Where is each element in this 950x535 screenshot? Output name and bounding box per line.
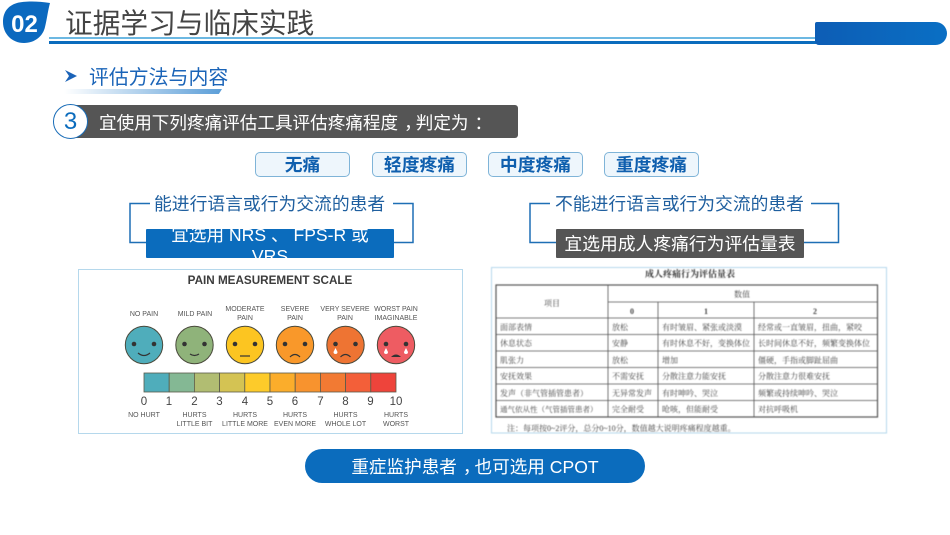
- table header: 2: [813, 307, 817, 316]
- scale numbers: 3: [216, 396, 223, 408]
- bracket: [529, 202, 840, 244]
- heading: 不能进行语言或行为交流的患者: [555, 194, 804, 214]
- chip: mild: [372, 152, 467, 177]
- table rows: 肌张力: [500, 355, 524, 365]
- top right pill: [815, 22, 947, 45]
- pain labels: PAIN: [287, 315, 303, 322]
- hurt labels: HURTS: [283, 412, 307, 419]
- hurt labels: HURTS: [183, 412, 207, 419]
- faces: [125, 326, 415, 364]
- table rows: 有时皱眉、紧张或淡漠: [662, 322, 742, 332]
- table header: 1: [704, 307, 708, 316]
- pain labels: SEVERE: [281, 306, 310, 313]
- pain grade chips: [255, 152, 699, 177]
- step banner: [53, 104, 518, 139]
- banner bar: ：: [474, 113, 492, 133]
- bracket: [129, 202, 414, 244]
- pain labels: MILD PAIN: [178, 311, 212, 318]
- table rows: 有时休息不好，变换体位: [662, 338, 750, 349]
- scale numbers: 0: [141, 396, 147, 408]
- scale numbers: 8: [342, 396, 349, 408]
- pain labels: NO PAIN: [130, 311, 158, 318]
- hurt labels: NO HURT: [128, 412, 161, 419]
- recommendation box: 宜选用成人疼痛行为评估量表: [564, 234, 796, 254]
- title: 证据学习与临床实践: [65, 8, 314, 39]
- hurt labels: HURTS: [334, 412, 358, 419]
- scale numbers: 9: [367, 396, 374, 408]
- chip: moderate: [488, 152, 583, 177]
- hurt labels: LITTLE MORE: [222, 421, 268, 428]
- banner bar: ，: [404, 113, 422, 133]
- table header: 0: [630, 307, 634, 316]
- table rows: 经常或一直皱眉，扭曲，紧咬: [758, 322, 863, 333]
- icon: arrow bullet: [65, 70, 77, 82]
- scale numbers: 6: [292, 396, 298, 408]
- scale numbers: 1: [166, 396, 172, 408]
- table rows: 无异常发声: [612, 388, 652, 398]
- table rows: 通气依从性（气管插管患者）: [500, 404, 598, 414]
- hurt labels: HURTS: [384, 412, 408, 419]
- pain labels: PAIN: [237, 315, 253, 322]
- table grid: [496, 285, 878, 417]
- pain labels: PAIN: [337, 315, 353, 322]
- table rows: 安静: [612, 338, 628, 348]
- table rows: 僵硬，手指或脚趾屈曲: [758, 355, 838, 366]
- callout: CPOT: ，: [463, 457, 480, 477]
- subheading text: 评估方法与内容: [89, 67, 228, 89]
- subheading underline: [64, 89, 222, 94]
- scale title: PAIN MEASUREMENT SCALE: [188, 274, 353, 287]
- chip: none: [255, 152, 350, 177]
- table rows: 不需安抚: [612, 371, 644, 381]
- heading: 能进行语言或行为交流的患者: [154, 194, 385, 214]
- pain labels: IMAGINABLE: [375, 315, 418, 322]
- chip: mild: 轻度疼痛: [384, 155, 455, 175]
- hurt labels: [128, 412, 410, 428]
- panel: communicative patients: [129, 194, 414, 258]
- chip: none: 无痛: [285, 155, 320, 175]
- table note: 注：每项按0~2评分，总分0~10分，数值越大说明疼痛程度越重。: [507, 423, 736, 434]
- table rows: 分散注意力能安抚: [662, 371, 726, 381]
- colour bar: [144, 373, 396, 392]
- table rows: [500, 322, 870, 415]
- table rows: 对抗呼吸机: [758, 404, 798, 414]
- step number: 3: [64, 108, 77, 135]
- table rows: 休息状态: [500, 338, 533, 348]
- table rows: 呛咳，但能耐受: [662, 404, 718, 415]
- pain labels: WORST PAIN: [374, 306, 418, 313]
- table rows: 增加: [662, 355, 678, 365]
- callout: CPOT: [305, 449, 645, 483]
- chip: severe: 重度疼痛: [616, 155, 687, 175]
- hurt labels: EVEN MORE: [274, 421, 316, 428]
- table title: 成人疼痛行为评估量表: [645, 268, 735, 279]
- hurt labels: LITTLE BIT: [177, 421, 213, 428]
- panel: non-communicative patients: [529, 194, 840, 258]
- section number badge: [3, 2, 50, 43]
- callout: CPOT: 重症监护患者 也可选用 CPOT: [351, 457, 599, 477]
- hurt labels: WORST: [383, 421, 410, 428]
- scale numbers: 5: [267, 396, 273, 408]
- pain labels: VERY SEVERE: [320, 306, 370, 313]
- banner bar: 宜使用下列疼痛评估工具评估疼痛程度 判定为: [99, 113, 469, 133]
- sub heading: [65, 67, 228, 94]
- table header: [544, 289, 817, 316]
- pain labels: [130, 306, 418, 322]
- table rows: 有时呻吟、哭泣: [662, 388, 718, 398]
- scale numbers: 10: [390, 396, 402, 408]
- chip: moderate: 中度疼痛: [500, 155, 571, 175]
- scale numbers: 4: [242, 396, 249, 408]
- section number badge: 02: [11, 11, 38, 38]
- pain measurement scale: [78, 269, 463, 434]
- table rows: 完全耐受: [612, 404, 644, 414]
- table rows: 分散注意力很难安抚: [758, 371, 830, 381]
- scale numbers: 7: [317, 396, 324, 408]
- table rows: 安抚效果: [500, 371, 532, 381]
- scale numbers: 2: [191, 396, 198, 408]
- adult pain behaviour scale table: [490, 266, 888, 434]
- table rows: 放松: [612, 322, 629, 332]
- face details: [132, 342, 408, 357]
- chip: severe: [604, 152, 699, 177]
- table rows: 发声（非气管插管患者）: [500, 388, 588, 398]
- banner bar: [71, 105, 518, 138]
- table rows: 频繁或持续呻吟、哭泣: [758, 388, 838, 398]
- table header: 数值: [734, 289, 750, 299]
- pain labels: MODERATE: [225, 306, 265, 313]
- step number: [53, 104, 88, 139]
- hurt labels: HURTS: [233, 412, 257, 419]
- recommendation box: [556, 228, 804, 258]
- table rows: 长时间休息不好，频繁变换体位: [758, 338, 870, 349]
- header rule: [49, 37, 819, 44]
- table rows: 放松: [612, 355, 629, 365]
- table rows: 面部表情: [500, 322, 532, 332]
- table header: 项目: [544, 299, 560, 308]
- header: [3, 2, 947, 45]
- scale numbers: [141, 396, 402, 408]
- hurt labels: WHOLE LOT: [325, 421, 367, 428]
